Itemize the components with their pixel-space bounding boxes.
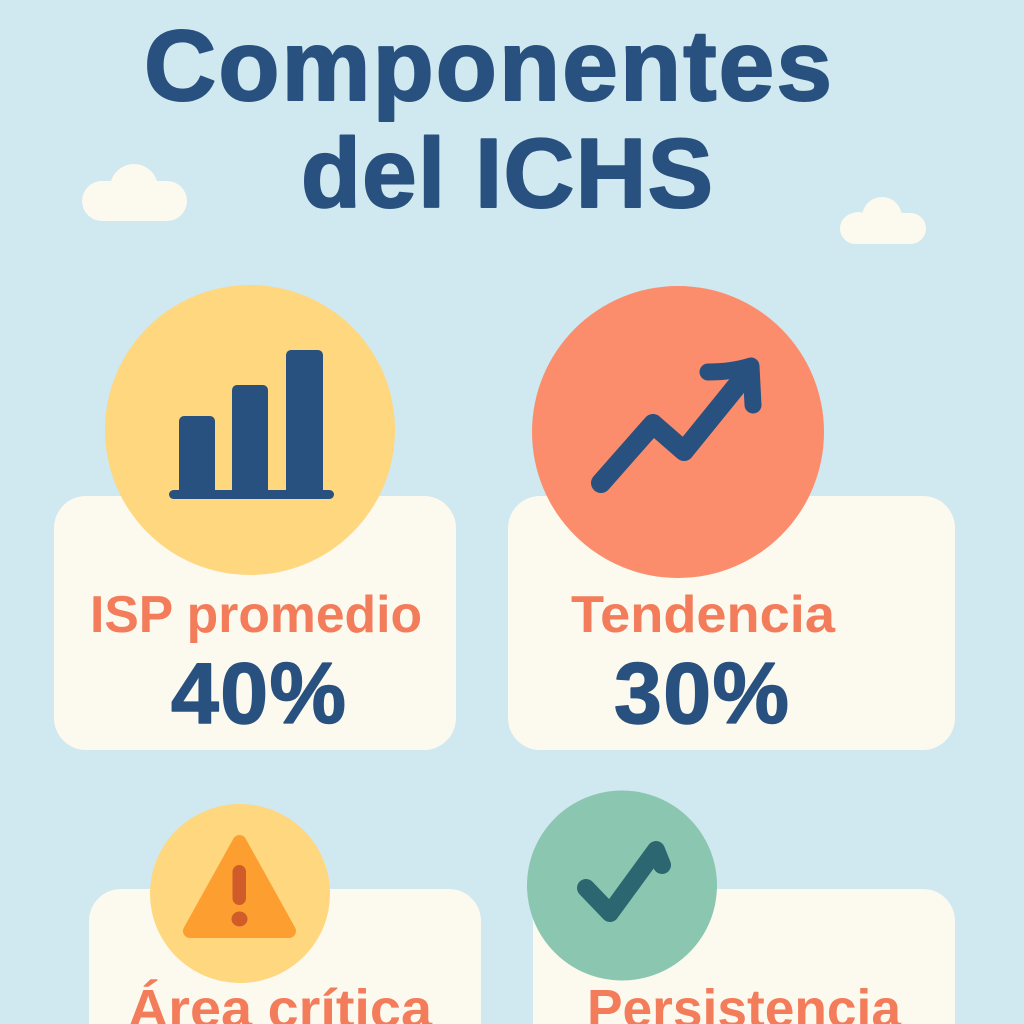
- icon: right cloud: [840, 197, 926, 244]
- title: del ICHS: [301, 118, 713, 228]
- panel: ISP promedio: [54, 285, 456, 750]
- card background: [508, 496, 955, 750]
- panel: Área crítica: [89, 804, 481, 1024]
- title: Componentes: [144, 10, 832, 122]
- value: 40%: 40%: [171, 646, 346, 742]
- panel: Persistencia: [527, 790, 955, 1024]
- label: ISP promedio: ISP promedio: [90, 586, 422, 644]
- panel: Tendencia: [508, 286, 955, 750]
- label: Tendencia: Tendencia: [571, 586, 836, 644]
- value: 30%: 30%: [614, 646, 789, 742]
- card background: [533, 889, 955, 1024]
- icon: left cloud: [82, 164, 187, 221]
- card background: [89, 889, 481, 1024]
- icon: warning triangle: [150, 804, 330, 983]
- icon: bar chart: [105, 285, 395, 575]
- icon: rising arrow: [532, 286, 824, 578]
- title: [144, 10, 832, 228]
- card background: [54, 496, 456, 750]
- icon: check mark: [527, 790, 717, 980]
